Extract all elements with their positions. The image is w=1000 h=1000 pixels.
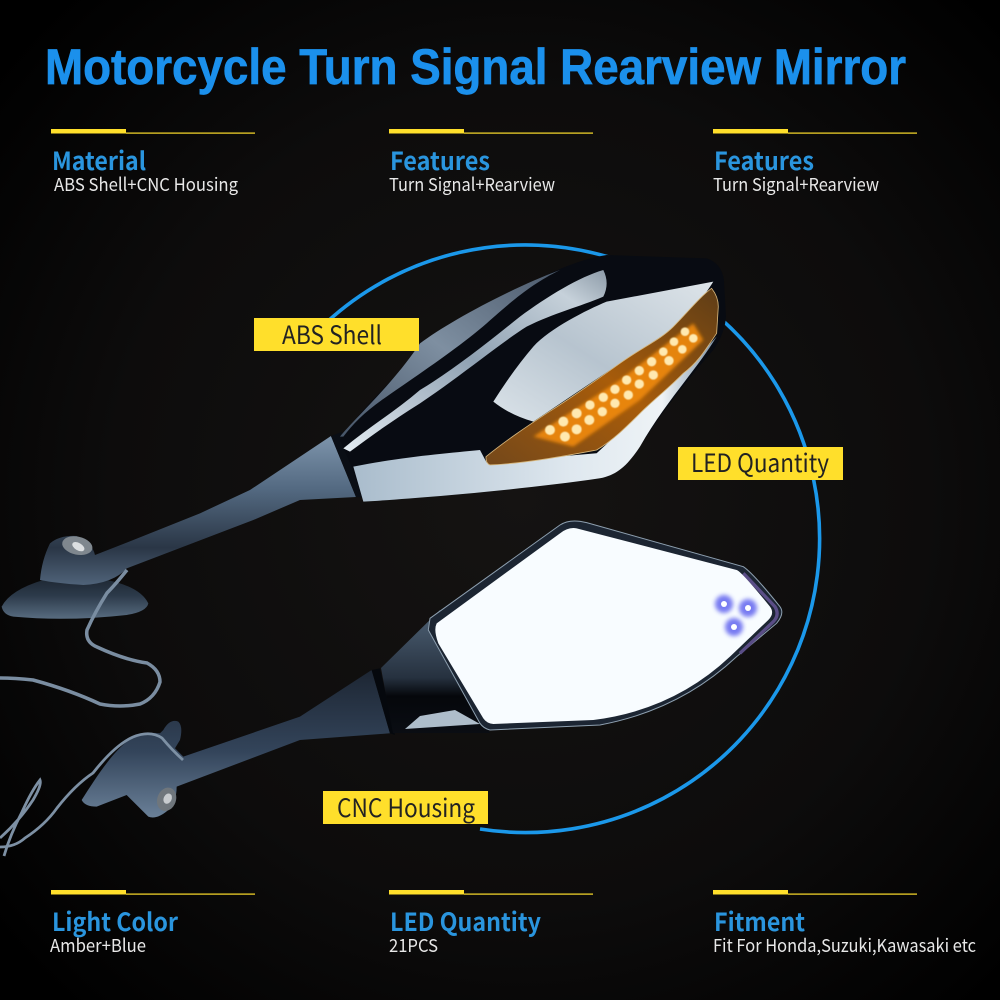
clamp and arm — [82, 670, 390, 817]
title: Motorcycle Turn Signal Rearview Mirror — [45, 39, 906, 95]
upper mirror shell — [340, 255, 726, 502]
spec: led quantity — [389, 890, 593, 958]
large light face — [493, 282, 713, 422]
shell body — [340, 255, 726, 502]
lower light band — [353, 337, 717, 502]
lower mirror — [381, 521, 782, 733]
housing neck — [381, 610, 490, 733]
upper mirror arm and mount — [2, 432, 363, 619]
housing highlight — [405, 710, 480, 729]
lower bolt — [154, 785, 180, 814]
spec: material: ABS Shell+CNC Housing — [54, 171, 238, 197]
label: LED Quantity: LED Quantity — [691, 444, 829, 480]
spec: material: Material — [52, 142, 146, 178]
amber-free violet rim — [740, 573, 777, 653]
spec: led quantity: LED Quantity — [390, 903, 542, 939]
label: ABS Shell — [254, 316, 419, 352]
upper wire — [0, 570, 160, 706]
glass — [435, 528, 772, 724]
led glow — [533, 323, 703, 447]
spec: features — [389, 129, 593, 197]
spec: led quantity: 21PCS — [389, 932, 438, 958]
spec: features repeated: Turn Signal+Rearview — [713, 171, 879, 197]
blue leds — [715, 595, 757, 636]
collar — [372, 668, 395, 735]
label: CNC Housing: CNC Housing — [337, 789, 475, 825]
spec: fitment: Fit For Honda,Suzuki,Kawasaki etc — [713, 932, 976, 958]
spec: light color: Light Color — [52, 903, 178, 939]
led rows — [545, 327, 698, 442]
spec: light color — [50, 890, 255, 958]
spec: light color: Amber+Blue — [50, 932, 146, 958]
spec: fitment: Fitment — [714, 903, 805, 939]
mount base — [2, 580, 148, 619]
blue circle arcs — [327, 245, 820, 833]
spec: features repeated: Features — [714, 142, 814, 178]
collar — [331, 432, 363, 497]
lower mirror arm and mount — [82, 668, 395, 817]
arm — [40, 436, 356, 585]
spec: features repeated — [713, 129, 917, 197]
spec: material — [51, 129, 255, 197]
spec: features: Features — [390, 142, 490, 178]
upper grey fin — [340, 270, 560, 437]
lower wires — [0, 734, 183, 856]
frame — [428, 521, 782, 730]
spec: fitment — [713, 890, 976, 958]
mount ball bolt — [60, 534, 94, 558]
spec: features: Turn Signal+Rearview — [389, 171, 555, 197]
amber lens — [486, 288, 718, 465]
light band — [343, 270, 607, 452]
label: ABS Shell: ABS Shell — [282, 316, 382, 352]
